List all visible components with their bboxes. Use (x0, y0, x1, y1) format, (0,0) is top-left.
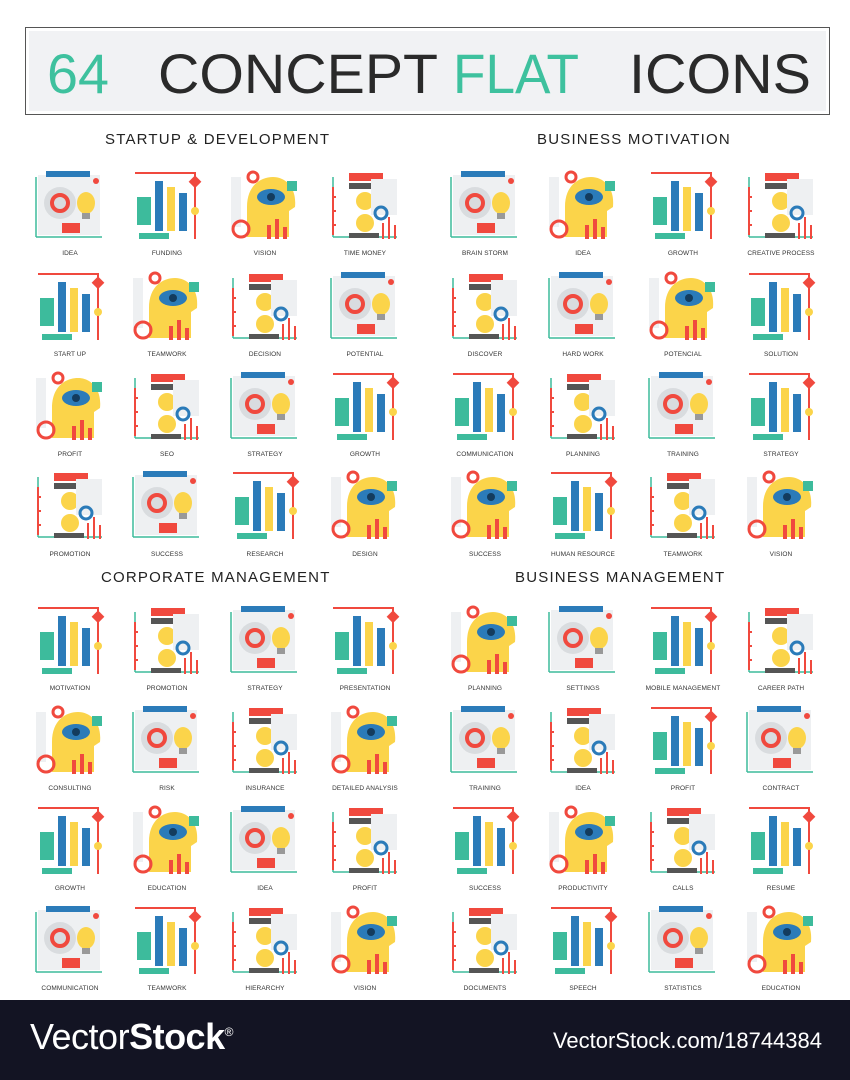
icon: profit (36, 372, 102, 458)
icon: discover: DISCOVER (468, 351, 502, 358)
icon: profit: PROFIT (671, 785, 695, 792)
icon: time money: TIME MONEY (344, 250, 386, 257)
icon: promotion (37, 473, 102, 558)
icon: motivation (38, 607, 104, 692)
title box (25, 27, 830, 115)
icon: research (233, 472, 300, 558)
icon: human resource (551, 472, 618, 558)
icon: success (443, 802, 527, 898)
icon: education (739, 902, 823, 998)
icon: documents (443, 902, 527, 998)
title text: ICONS (629, 42, 811, 105)
icon: success (132, 471, 199, 558)
icon: strategy: STRATEGY (247, 451, 283, 458)
icon: growth (651, 172, 718, 257)
icon: vision (747, 470, 813, 558)
icon: training: TRAINING (667, 451, 699, 458)
icon: growth: GROWTH (668, 250, 698, 257)
icon: speech: SPEECH (569, 985, 597, 992)
icon: presentation: PRESENTATION (340, 685, 390, 692)
icon: start up (38, 273, 104, 358)
icon: contract (739, 702, 823, 798)
icon: education (125, 802, 209, 898)
icon: communication (453, 373, 520, 458)
icon: decision (232, 274, 297, 358)
icon: consulting: CONSULTING (48, 785, 92, 792)
icon: solution: SOLUTION (764, 351, 798, 358)
icon: seo (134, 374, 199, 458)
icon: start up: START UP (54, 351, 86, 358)
heading: startup & development: STARTUP & DEVELOPMENT (105, 131, 330, 148)
icon: teamwork (125, 902, 209, 998)
heading: corporate management: CORPORATE MANAGEMENT (101, 569, 331, 586)
icon: vision (323, 902, 407, 998)
icon: hard work: HARD WORK (562, 351, 604, 358)
title text: CONCEPT (158, 42, 438, 105)
icon: solution (749, 273, 816, 358)
icon: vision: VISION (254, 250, 276, 257)
icon: detailed analysis (323, 702, 407, 798)
icon: decision: DECISION (249, 351, 281, 358)
panel: corporate management (35, 606, 400, 992)
icon: communication: COMMUNICATION (456, 451, 514, 458)
panel: business management (425, 595, 850, 1000)
icon: creative process: CREATIVE PROCESS (747, 250, 815, 257)
icon: settings (541, 602, 625, 698)
icon: profit: PROFIT (353, 885, 377, 892)
icon: vision: VISION (770, 551, 792, 558)
icon: detailed analysis: DETAILED ANALYSIS (332, 785, 398, 792)
icon: strategy: STRATEGY (763, 451, 799, 458)
icon: profit (641, 702, 725, 798)
icon: teamwork: TEAMWORK (147, 985, 187, 992)
icon: brain storm: BRAIN STORM (462, 250, 508, 257)
icon: hierarchy: HIERARCHY (245, 985, 285, 992)
icon: education: EDUCATION (762, 985, 800, 992)
icon: success: SUCCESS (469, 885, 501, 892)
footer logo: VectorStock® (30, 1016, 233, 1057)
icon: human resource: HUMAN RESOURCE (551, 551, 615, 558)
icon: idea (541, 702, 625, 798)
icon: mobile management: MOBILE MANAGEMENT (646, 685, 720, 692)
icon: training: TRAINING (469, 785, 501, 792)
icon: idea (223, 802, 307, 898)
icon: profit (323, 802, 407, 898)
icon: idea (35, 171, 102, 257)
icon: vision: VISION (354, 985, 376, 992)
icon: speech (541, 902, 625, 998)
icon: resume: RESUME (767, 885, 795, 892)
icon: growth (28, 802, 112, 898)
icon: statistics: STATISTICS (664, 985, 702, 992)
icon: planning (550, 374, 615, 458)
icon: strategy (749, 373, 816, 458)
icon: idea: IDEA (257, 885, 273, 892)
icon: planning: PLANNING (566, 451, 600, 458)
icon: risk (125, 702, 209, 798)
icon: presentation (333, 607, 400, 692)
icon: idea: IDEA (62, 250, 78, 257)
icon: productivity: PRODUCTIVITY (558, 885, 608, 892)
footer url: VectorStock.com/18744384 (553, 1028, 822, 1053)
title text: FLAT (453, 42, 579, 105)
icon: design (331, 470, 397, 558)
icon: productivity (541, 802, 625, 898)
panel: business motivation (450, 170, 816, 558)
icon: potential: POTENTIAL (346, 351, 384, 358)
icon: profit: PROFIT (58, 451, 82, 458)
icon: teamwork (650, 473, 715, 558)
icon: time money (332, 173, 397, 257)
icon: vision (231, 170, 297, 257)
icon: teamwork: TEAMWORK (147, 351, 187, 358)
heading: business management: BUSINESS MANAGEMENT (515, 569, 725, 586)
icon: contract: CONTRACT (763, 785, 799, 792)
icon: consulting (28, 702, 112, 798)
icon: promotion: PROMOTION (50, 551, 90, 558)
icon: risk: RISK (159, 785, 175, 792)
icon: funding: FUNDING (152, 250, 182, 257)
icon: calls: CALLS (672, 885, 694, 892)
icon: teamwork: TEAMWORK (663, 551, 703, 558)
icon: resume (739, 802, 823, 898)
icon: success: SUCCESS (151, 551, 183, 558)
icon: strategy (230, 606, 297, 692)
icon: career path (739, 602, 823, 698)
icon: research: RESEARCH (247, 551, 283, 558)
icon: growth: GROWTH (55, 885, 85, 892)
icon: idea: IDEA (575, 250, 591, 257)
panel: startup & development (35, 170, 400, 558)
icon: strategy (230, 372, 297, 458)
icon: statistics (641, 902, 725, 998)
icon: hierarchy (223, 902, 307, 998)
icon: insurance: INSURANCE (245, 785, 285, 792)
icon: strategy: STRATEGY (247, 685, 283, 692)
icon: seo: SEO (160, 451, 174, 458)
icon: promotion: PROMOTION (146, 685, 187, 692)
icon: training (443, 702, 527, 798)
icon: potential (330, 272, 397, 358)
icon: growth (333, 373, 400, 458)
icon: planning (443, 602, 527, 698)
icon: potencial (649, 272, 715, 358)
title text (47, 42, 811, 105)
icon: creative process (747, 173, 815, 257)
icon: training (648, 372, 715, 458)
icon: discover (452, 274, 517, 358)
footer bar (0, 1000, 850, 1080)
icon: success (451, 470, 517, 558)
heading: business motivation: BUSINESS MOTIVATION (537, 131, 731, 148)
icon: communication: COMMUNICATION (41, 985, 99, 992)
icon: calls (641, 802, 725, 898)
icon: settings: SETTINGS (566, 685, 600, 692)
icon: design: DESIGN (352, 551, 378, 558)
icon: communication (28, 902, 112, 998)
icon: funding (135, 172, 202, 257)
icon: mobile management (641, 602, 725, 698)
icon: promotion (134, 608, 199, 692)
icon: insurance (223, 702, 307, 798)
icon: brain storm (450, 171, 517, 257)
title text: 64 (47, 42, 109, 105)
icon: career path: CAREER PATH (758, 685, 804, 692)
icon: success: SUCCESS (469, 551, 501, 558)
icon: idea: IDEA (575, 785, 591, 792)
icon: growth: GROWTH (350, 451, 380, 458)
icon: teamwork (133, 272, 199, 358)
icon: planning: PLANNING (468, 685, 502, 692)
icon: motivation: MOTIVATION (50, 685, 90, 692)
icon: hard work (548, 272, 615, 358)
icon: idea (549, 170, 615, 257)
icon: documents: DOCUMENTS (464, 985, 506, 992)
icon: potencial: POTENCIAL (664, 351, 702, 358)
icon: education: EDUCATION (148, 885, 186, 892)
